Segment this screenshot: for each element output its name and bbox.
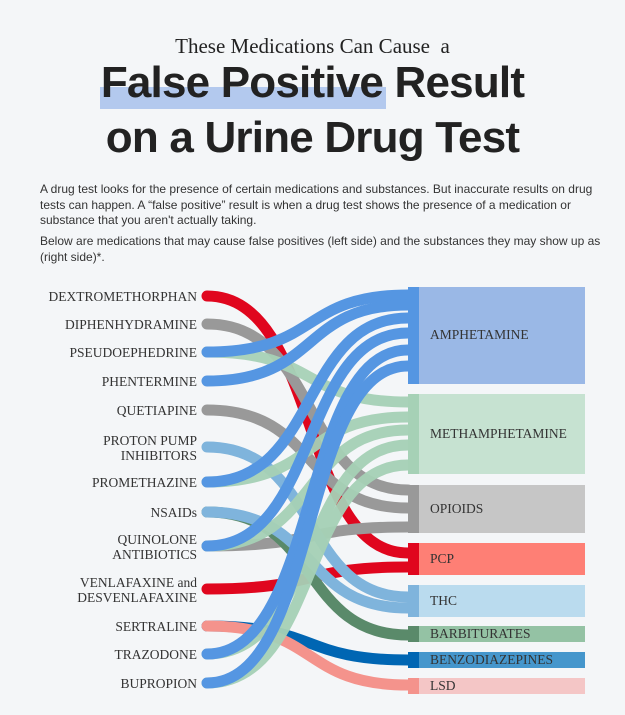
intro text: A drug test looks for the presence of certain medications and substances. But inaccurate results on drug tests can happen. A “false positive” result is when a drug test shows the presence of a medication or substance that you aren't actually taking. (40, 182, 592, 227)
title line 1: False Positive Result (101, 58, 524, 107)
node: lsd: LSD (430, 678, 456, 693)
text: QUETIAPINE (117, 403, 197, 418)
node: methamphetamine: METHAMPHETAMINE (430, 426, 567, 441)
text: PHENTERMINE (102, 374, 197, 389)
text: PROMETHAZINE (92, 475, 197, 490)
node: opioids: OPIOIDS (430, 501, 483, 516)
text: SERTRALINE (115, 619, 197, 634)
node: lsd (408, 678, 585, 694)
node: pcp: PCP (430, 551, 454, 566)
title highlight (100, 87, 386, 109)
intro text 2: Below are medications that may cause false positives (left side) and the substances they may show up as (right side)*. (40, 234, 600, 264)
node: amphetamine: AMPHETAMINE (430, 327, 529, 342)
text: PSEUDOEPHEDRINE (69, 345, 197, 360)
text: QUINOLONE (118, 532, 197, 547)
node: thc (408, 585, 585, 617)
text: DIPHENHYDRAMINE (65, 317, 197, 332)
text: BUPROPION (120, 676, 197, 691)
node: opioids (408, 485, 585, 533)
text: ANTIBIOTICS (112, 547, 197, 562)
node: pcp (408, 543, 585, 575)
subtitle: These Medications Can Cause a (175, 34, 450, 58)
text: VENLAFAXINE and (80, 575, 197, 590)
node: thc: THC (430, 593, 457, 608)
text: PROTON PUMP (103, 433, 197, 448)
node: methamphetamine (408, 394, 585, 474)
node: barbiturates (408, 626, 585, 642)
node: barbiturates: BARBITURATES (430, 626, 531, 641)
left labels: DEXTROMETHORPHAN (48, 289, 197, 304)
title line 2: on a Urine Drug Test (106, 113, 519, 162)
node: benzodiazepines: BENZODIAZEPINES (430, 652, 553, 667)
text: TRAZODONE (114, 647, 197, 662)
text: NSAIDs (150, 505, 197, 520)
node: amphetamine (408, 287, 585, 384)
node: benzodiazepines (408, 652, 585, 668)
text: DESVENLAFAXINE (77, 590, 197, 605)
text: INHIBITORS (121, 448, 197, 463)
